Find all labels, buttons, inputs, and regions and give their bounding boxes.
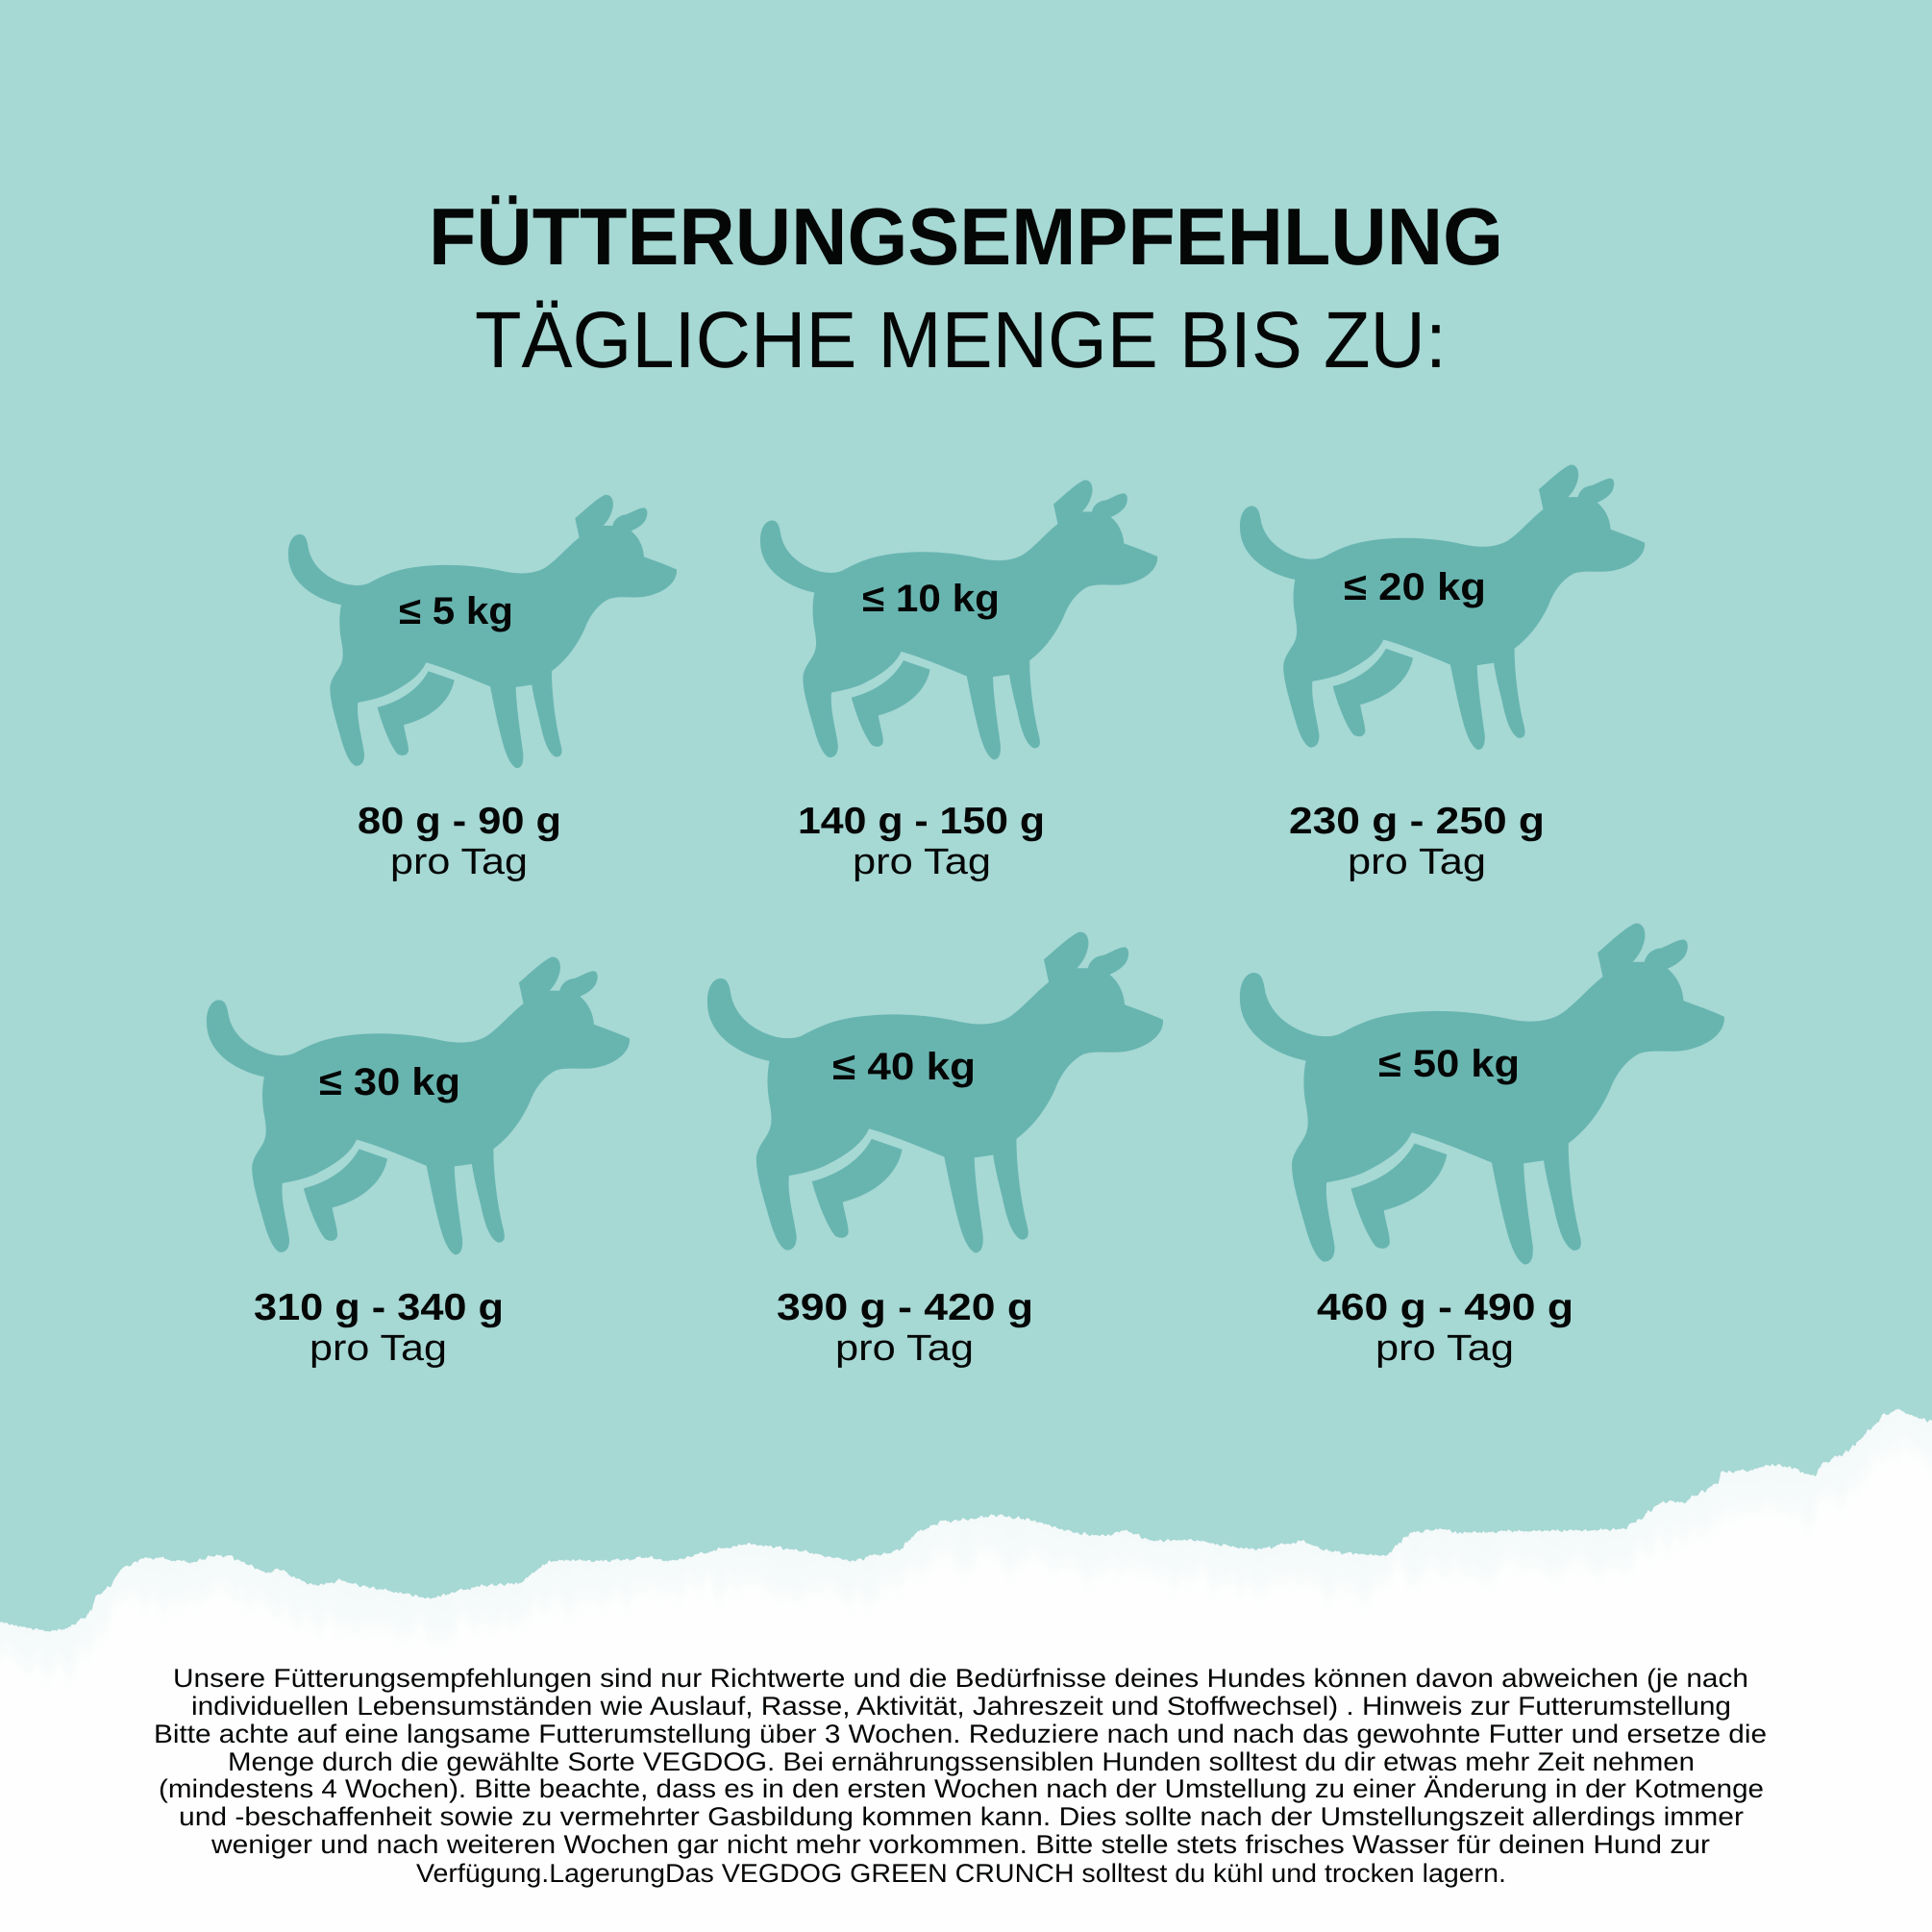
weight label 40 kg: ≤ 40 kg [832, 1046, 976, 1088]
per day label: pro Tag [390, 842, 528, 882]
panel: up to 40 kg [707, 932, 1163, 1369]
icon: dog 50 kg [1240, 924, 1724, 1265]
icon: dog 5 kg [288, 495, 677, 768]
weight label 10 kg: ≤ 10 kg [862, 578, 1000, 620]
panel: up to 5 kg [288, 495, 677, 882]
amount 230-250 g: 230 g - 250 g [1289, 801, 1545, 842]
feeding note text block: weniger und nach weiteren Wochen gar nicht mehr vorkommen. Bitte stelle stets frisches Wasser für deinen Hund zur [211, 1830, 1710, 1859]
per day label: pro Tag [853, 842, 991, 882]
heading block [429, 191, 1503, 384]
panel: up to 50 kg [1240, 924, 1724, 1369]
amount 390-420 g: 390 g - 420 g [777, 1287, 1033, 1328]
amount 80-90 g: 80 g - 90 g [358, 801, 561, 842]
icon: dog 30 kg [207, 957, 630, 1254]
panel: up to 20 kg [1240, 465, 1645, 882]
per day label: pro Tag [1348, 842, 1486, 882]
per day label: pro Tag [310, 1328, 447, 1369]
icon: dog 20 kg [1240, 465, 1645, 750]
weight label 20 kg: ≤ 20 kg [1344, 566, 1486, 608]
amount 140-150 g: 140 g - 150 g [798, 801, 1045, 842]
panel: up to 10 kg [760, 480, 1157, 882]
panel: up to 30 kg [207, 957, 630, 1369]
amount 460-490 g: 460 g - 490 g [1317, 1287, 1573, 1328]
subtitle: TÄGLICHE MENGE BIS ZU: [475, 295, 1447, 384]
weight label 5 kg: ≤ 5 kg [399, 590, 513, 632]
feeding note text block: und -beschaffenheit sowie zu vermehrter Gasbildung kommen kann. Dies sollte nach der Umstellungszeit allerdings immer [179, 1802, 1744, 1831]
feeding note text block: Verfügung.LagerungDas VEGDOG GREEN CRUNCH solltest du kühl und trocken lagern. [416, 1859, 1506, 1888]
title: FÜTTERUNGSEMPFEHLUNG [429, 191, 1503, 282]
icon: dog 40 kg [707, 932, 1163, 1252]
feeding note text block: Bitte achte auf eine langsame Futterumstellung über 3 Wochen. Reduziere nach und nach das gewohnte Futter und ersetze die [154, 1720, 1767, 1748]
weight label 50 kg: ≤ 50 kg [1378, 1043, 1520, 1085]
per day label: pro Tag [1375, 1328, 1514, 1369]
feeding note text block [154, 1664, 1767, 1888]
feeding note text block: (mindestens 4 Wochen). Bitte beachte, dass es in den ersten Wochen nach der Umstellung zu einer Änderung in der Kotmenge [159, 1774, 1764, 1803]
weight label 30 kg: ≤ 30 kg [319, 1061, 460, 1103]
icon: dog 10 kg [760, 480, 1157, 759]
feeding note text block: individuellen Lebensumständen wie Auslauf, Rasse, Aktivität, Jahreszeit und Stoffwechsel) . Hinweis zur Futterumstellung [191, 1692, 1731, 1721]
amount 310-340 g: 310 g - 340 g [254, 1287, 504, 1328]
per day label: pro Tag [835, 1328, 974, 1369]
feeding note text block: Unsere Fütterungsempfehlungen sind nur Richtwerte und die Bedürfnisse deines Hundes können davon abweichen (je nach [173, 1664, 1748, 1693]
feeding note text block: Menge durch die gewählte Sorte VEGDOG. Bei ernährungssensiblen Hunden solltest du dir etwas mehr Zeit nehmen [228, 1747, 1695, 1776]
